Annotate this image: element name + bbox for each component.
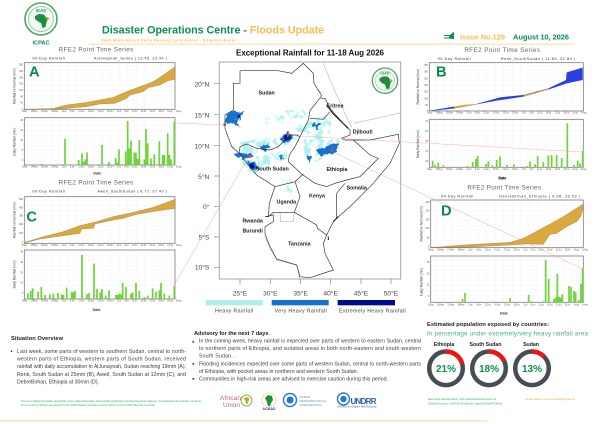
header rule	[88, 43, 574, 46]
partner logos	[220, 393, 378, 411]
donut: South Sudan	[470, 342, 506, 385]
map axis labels: 20°N	[194, 80, 210, 88]
chart B daily bars: 70	[425, 121, 429, 123]
map axis labels	[194, 80, 399, 297]
chart D cumulative plot: 200	[425, 219, 430, 221]
chart D cumulative plot: 80	[427, 237, 430, 239]
chart A: AlJunaynah_Sudan ( 13.45, 22.44 )	[94, 56, 167, 60]
chart B cumulative plot: 300	[424, 72, 429, 74]
advisory text: of Ethiopia, with pocket areas in northern and western South Sudan.	[199, 369, 358, 375]
chart D daily bars	[419, 256, 588, 307]
country labels: Eritrea	[327, 103, 343, 109]
chart A cumulative plot: 120	[19, 90, 24, 92]
chart A cumulative plot: 160	[19, 84, 24, 86]
situation text: DebreBirhan, Ethiopia at 30mm (D).	[17, 379, 99, 385]
chart B cumulative plot: Rainfall vs Normal (mm)	[416, 69, 420, 105]
chart D daily bars: Daily Rainfall (mm)	[419, 268, 423, 296]
map axis labels: 35°E	[293, 289, 308, 297]
advisory	[192, 331, 421, 382]
map axis labels: 40°E	[323, 289, 338, 297]
chart A cumulative plot: 280	[19, 65, 24, 67]
chart B daily bars: 25	[425, 151, 429, 153]
chart A cumulative plot: Rainfall vs Normal (mm)	[12, 68, 16, 104]
chart C cumulative plot: Rainfall vs Normal (mm)	[12, 202, 16, 238]
population exposure panel	[427, 322, 588, 406]
chart C cumulative plot: 1May 16May 21May 26May 1Jun 6Jun 11Jun 16Jun 21Jun 26Jun 1Jul 6Jul 11Jul 16Jul 21Jul 26Jul 1Aug 6Aug	[22, 244, 182, 247]
logo: WMO	[284, 394, 327, 407]
country borders	[225, 63, 399, 278]
chart B cumulative plot	[416, 63, 587, 115]
donut: Sudan	[515, 342, 549, 385]
chart C cumulative plot: 300	[19, 216, 24, 218]
contact: Contact: situation.room.humanitarian@icpac.net	[525, 397, 575, 401]
rainfall: heavy	[230, 109, 341, 193]
sources: East Africa Hazards Watch: https://eahazardswatch.icpac.net	[428, 397, 496, 401]
chart B cumulative plot: 350	[424, 65, 429, 67]
country labels: Tanzania	[288, 242, 311, 248]
chart B: Date	[498, 176, 506, 180]
chart B	[416, 47, 587, 180]
chart A daily bars: 18	[20, 120, 24, 122]
chart A cumulative plot: 240	[19, 71, 24, 73]
map axis labels: 10°S	[195, 264, 210, 272]
chart D title: RFE2 Point Time Series	[467, 185, 541, 192]
chart B daily bars	[416, 119, 587, 171]
chart A cumulative plot: 1May 16May 21May 26May 1Jun 6Jun 11Jun 16Jun 21Jun 26Jun 1Jul 6Jul 11Jul 16Jul 21Jul 26Jul 1Aug 6Aug	[22, 110, 182, 113]
legend: Extremely Heavy Rainfall	[339, 308, 406, 314]
donut: South Sudan: South Sudan	[470, 342, 502, 348]
country labels: Ethiopia	[326, 167, 348, 173]
logo: ACMAD: ACMAD	[262, 407, 276, 411]
chart A: Date	[93, 172, 101, 176]
donut: Ethiopia	[429, 342, 463, 385]
chart A daily bars: 2	[22, 160, 24, 162]
logo: WMO: METEOROLOGICAL	[300, 399, 327, 403]
chart D daily bars: 15	[427, 285, 430, 287]
donut: Ethiopia: Ethiopia	[434, 342, 454, 348]
chart D cumulative plot: 0	[428, 247, 430, 249]
advisory text: Flooding incidences expected over some parts of western Sudan, central to north-western parts	[199, 361, 421, 367]
chart C cumulative plot: 200	[19, 224, 24, 226]
leader lines	[173, 123, 583, 287]
chart B: 90-Day Rainfall	[438, 57, 471, 61]
map axis labels: 50°E	[384, 289, 399, 297]
country labels: Rwanda	[242, 219, 263, 225]
chart C: 90-Day Rainfall	[32, 189, 65, 193]
logo: WMO: WORLD	[300, 395, 310, 399]
icon: issue	[444, 32, 454, 39]
logo: IGAD on map: IGAD	[380, 72, 390, 76]
chart A: 90-Day Rainfall	[32, 56, 65, 60]
disclaimer: free or implying official endorsement by the IGAD Disaster Operations Centre (DOC) or from ICPAC Member Countries	[21, 403, 156, 407]
map axis labels: 45°E	[354, 289, 369, 297]
logo: African Union: African	[220, 395, 241, 402]
chart A cumulative plot: 40	[20, 103, 24, 105]
country labels: Djibouti	[353, 130, 373, 136]
chart B daily bars: 40	[425, 141, 429, 143]
donut: Ethiopia: 21%	[436, 364, 456, 375]
chart C cumulative plot: 400	[19, 207, 24, 209]
logo: UNDRR	[337, 393, 378, 408]
chart A daily bars: 6	[22, 150, 24, 152]
title: Disaster Operations Centre - Floods Update	[102, 25, 324, 37]
country labels: Sudan	[259, 91, 275, 97]
chart C daily bars: 1May 16May 21May 26May 1Jun 6Jun 11Jun 16Jun 21Jun 26Jun 1Jul 6Jul 11Jul 16Jul 21Jul 26Jul 1Aug 6Aug	[22, 300, 182, 303]
donut: Sudan: 13%	[522, 364, 542, 375]
donut: Sudan: Sudan	[523, 342, 539, 348]
rainfall: extreme	[237, 115, 291, 169]
advisory text: South Sudan. .	[199, 354, 236, 360]
chart A daily bars: 1May 16May 21May 26May 1Jun 6Jun 11Jun 16Jun 21Jun 26Jun 1Jul 6Jul 11Jul 16Jul 21Jul 26Jul 1Aug 6Aug	[22, 166, 182, 169]
map title: Exceptional Rainfall for 11-18 Aug 2026	[236, 48, 385, 58]
logo: ACMAD	[262, 393, 276, 411]
legend: Very Heavy Rainfall	[275, 308, 327, 314]
panel subheading: In percentage under extremely/very heavy rainfall area	[427, 330, 588, 338]
chart B letter: B	[436, 65, 447, 81]
country labels: Burundi	[242, 229, 263, 235]
subtitle: IGAD Multi-Hazard Early Warning Early Action - Situation-Room	[101, 38, 235, 42]
chart A daily bars: 10	[20, 140, 24, 142]
chart B cumulative plot: 50	[425, 105, 429, 107]
advisory text	[192, 338, 421, 382]
chart C daily bars: 15	[20, 283, 24, 285]
chart A daily bars	[12, 118, 182, 169]
logo: UNDRR: UN Office for Disaster Risk Reduction	[337, 406, 378, 408]
chart D: Date	[500, 312, 508, 316]
chart B daily bars: 55	[425, 131, 429, 133]
chart A	[12, 46, 182, 176]
chart C: Aweil_SouthSudan ( 8.77, 27.40 )	[97, 189, 167, 193]
chart D: 90-Day Rainfall	[441, 194, 474, 198]
chart C daily bars: 25	[20, 272, 24, 274]
chart B: Renk_SouthSudan ( 11.83, 32.80 )	[501, 57, 575, 61]
situation text	[11, 349, 186, 385]
chart B daily bars: Daily Rainfall (mm)	[416, 130, 420, 158]
chart B daily bars: 1May 16May 21May 26May 1Jun 6Jun 11Jun 16Jun 21Jun 26Jun 1Jul 6Jul 11Jul 16Jul 21Jul 26Jul 1Aug 6Aug	[427, 168, 587, 171]
chart C title: RFE2 Point Time Series	[59, 180, 133, 187]
chart B cumulative plot: 0	[427, 111, 429, 113]
chart C cumulative plot: 0	[22, 243, 24, 245]
situation text: rainfall with daily accumulation in AlJunaynah, Sudan reaching 19mm (A),	[17, 364, 186, 370]
neighbouring coastlines	[265, 63, 401, 280]
map axis labels: 30°E	[263, 289, 278, 297]
legend	[206, 300, 406, 314]
chart D letter: D	[441, 203, 452, 219]
chart C daily bars: 35	[20, 262, 24, 264]
situation text: Last week, some parts of western to southern Sudan, central to north-	[17, 349, 186, 355]
chart D cumulative plot: 140	[425, 228, 430, 230]
footer rule	[0, 420, 488, 422]
advisory text: In the coming week, heavy rainfall is expected over parts of western to eastern Sudan, central	[199, 338, 421, 344]
logo: IGAD on map	[372, 68, 398, 93]
advisory heading: Advisory for the next 7 days	[194, 331, 268, 337]
chart B cumulative plot: 200	[424, 85, 429, 87]
country labels: Somalia	[346, 186, 367, 192]
donut: South Sudan: 18%	[479, 364, 499, 375]
chart C daily bars	[12, 250, 182, 303]
map axis labels: 25°E	[233, 289, 248, 297]
situation heading: Situation Overview	[11, 336, 64, 342]
situation text: Renk, South Sudan at 25mm (B), Aweil, South Sudan at 12mm (C), and	[17, 372, 186, 378]
chart C cumulative plot: 100	[19, 233, 24, 235]
chart C letter: C	[26, 209, 37, 225]
map axis labels: 5°S	[199, 234, 210, 242]
disclaimer	[21, 399, 202, 407]
map axis labels: 10°N	[194, 142, 210, 150]
logo: IGAD ICPAC	[25, 3, 57, 46]
issue date: August 10, 2026	[513, 32, 569, 41]
chart B cumulative plot: 150	[424, 92, 429, 94]
chart C: Date	[93, 308, 101, 312]
chart C cumulative plot: 500	[19, 199, 24, 201]
logo: UNDRR: UNDRR	[350, 397, 377, 406]
chart B title: RFE2 Point Time Series	[464, 47, 540, 54]
chart C daily bars: 45	[20, 252, 24, 254]
chart B cumulative plot: 250	[424, 78, 429, 80]
logo: IGAD ICPAC: IGAD	[36, 8, 46, 13]
sources: Data/Hot Sources : ICPAC/IGAD Member States/NCWs/NPCMHSs	[428, 402, 503, 406]
advisory text: to northern parts of Ethiopia, and isolated areas in both north-eastern and south-western	[199, 346, 421, 352]
country labels	[242, 91, 373, 248]
sources	[428, 397, 503, 406]
logo: WMO: ORGANIZATION	[300, 403, 321, 407]
panel heading: Estimated population exposed by countries:	[427, 322, 549, 328]
chart A letter: A	[29, 65, 40, 81]
chart C daily bars: 5	[22, 293, 24, 295]
chart D: Date	[498, 177, 506, 181]
chart C cumulative plot	[12, 197, 182, 247]
chart A cumulative plot: 0	[22, 109, 24, 111]
chart A daily bars: Daily Rainfall (mm)	[12, 128, 16, 156]
map axis labels: 5°N	[198, 173, 210, 181]
chart A cumulative plot	[12, 63, 182, 113]
chart A cumulative plot: 200	[19, 77, 24, 79]
chart D daily bars: 25	[427, 273, 430, 275]
chart D daily bars: 1May 16May 21May 26May 1Jun 6Jun 11Jun 16Jun 21Jun 26Jun 1Jul 6Jul 11Jul 16Jul 21Jul 26Jul 1Aug 6Aug	[428, 304, 588, 307]
chart A title: RFE2 Point Time Series	[59, 46, 133, 53]
chart D	[419, 177, 588, 316]
legend: Heavy Rainfall	[215, 308, 253, 314]
header	[25, 3, 574, 46]
disclaimer: The use of political boundaries, geographic names, related information, and potential considerations for response are for reference, not warranted to be error-free or implying	[21, 399, 202, 403]
chart B cumulative plot: 1May 16May 21May 26May 1Jun 6Jun 11Jun 16Jun 21Jun 26Jun 1Jul 6Jul 11Jul 16Jul 21Jul 26Jul 1Aug 6Aug	[427, 112, 587, 115]
country labels: Kenya	[309, 194, 325, 200]
logo: IGAD ICPAC: ICPAC	[32, 40, 50, 46]
situation text: western parts of Ethiopia, western parts of South Sudan, received	[17, 357, 186, 363]
chart A daily bars: 14	[20, 130, 24, 132]
map axis labels: 0°	[203, 203, 210, 211]
issue number: Issue No.129	[460, 32, 505, 41]
chart A cumulative plot: 80	[20, 96, 24, 98]
chart C	[12, 180, 182, 312]
chart D cumulative plot: Rainfall vs Normal (mm)	[419, 206, 423, 242]
logo: African Union: Union	[223, 402, 240, 409]
chart D cumulative plot: 320	[425, 202, 430, 204]
rainfall: very heavy	[226, 112, 340, 171]
chart B cumulative plot: 100	[424, 98, 429, 100]
map panel	[194, 62, 406, 314]
country labels: South Sudan	[256, 166, 289, 172]
chart B daily bars: 10	[425, 161, 429, 163]
chart D cumulative plot: 1May 16May 21May 26May 1Jun 6Jun 11Jun 16Jun 21Jun 26Jun 1Jul 6Jul 11Jul 16Jul 21Jul 26Jul 1Aug 6Aug	[428, 248, 588, 251]
chart D daily bars: 35	[427, 262, 430, 264]
chart D: DebreBirhan_Ethiopia ( 9.68, 39.53 )	[499, 194, 580, 198]
country labels: Uganda	[277, 200, 296, 206]
chart D cumulative plot: 260	[425, 211, 430, 213]
logo: African Union	[220, 395, 252, 409]
map axis labels: 15°N	[194, 112, 210, 120]
chart D cumulative plot	[419, 200, 588, 251]
situation overview	[11, 336, 202, 407]
chart D daily bars: 5	[428, 296, 430, 298]
advisory text: Communities in high-risk areas are advised to exercise caution during this period.	[199, 376, 388, 382]
chart C daily bars: Daily Rainfall (mm)	[12, 260, 16, 288]
